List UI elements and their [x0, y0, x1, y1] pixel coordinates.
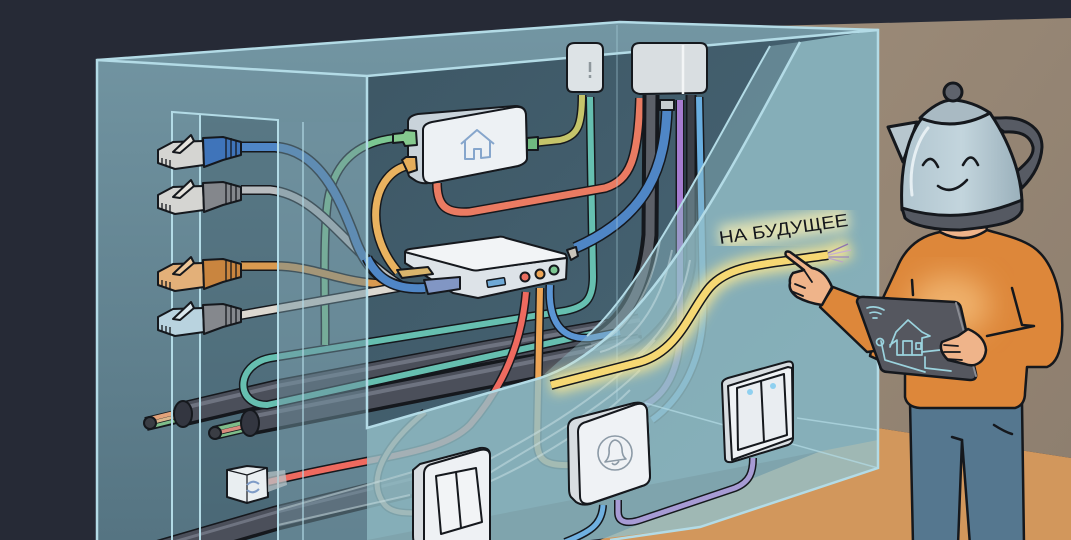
- switch: doorbell: [568, 403, 650, 505]
- glass reflection: light lower right pane: [367, 30, 878, 540]
- kettle spout: [888, 122, 917, 162]
- cable: blue from connector 1: [241, 147, 425, 288]
- sweater body and arm: [870, 230, 1062, 408]
- cable: salmon hub to box: [437, 98, 640, 212]
- cable: doorbell purple to right switch: [618, 458, 753, 522]
- cable bundle: black conduit from junction box: [590, 95, 691, 360]
- sweater sleeve left: [820, 287, 882, 352]
- sleeve folds: [912, 280, 1034, 440]
- cable: teal loop: [243, 97, 600, 405]
- connector: blue RJ45: [158, 135, 241, 169]
- device: junction box: [632, 43, 707, 110]
- cable: white from connector 4: [241, 287, 400, 315]
- cable: green: [325, 138, 395, 345]
- holding hand: [941, 329, 986, 365]
- cable: black 1: [183, 320, 640, 414]
- cable: purple from junction box: [645, 100, 680, 405]
- device: white plug adapter: [227, 466, 287, 503]
- cable: light blue from junction box: [652, 97, 703, 420]
- trousers: [910, 402, 1024, 540]
- sweater highlight: [910, 275, 990, 335]
- finger lines: [791, 270, 962, 360]
- cable: blue near router: [367, 258, 425, 288]
- kettle highlight: [911, 128, 928, 195]
- switch: double rocker right: [722, 362, 793, 462]
- cable ends with coloured wires: [144, 401, 259, 439]
- connector: grey RJ45: [158, 180, 241, 214]
- glass pane wash over cables right of the inner pane: [278, 122, 367, 540]
- wall: concrete: [770, 18, 1071, 458]
- glass reflection band between the diagonals: [540, 42, 800, 378]
- kettle lid: [920, 100, 990, 124]
- cable: orange hub to router: [376, 165, 410, 272]
- cable: black 3 lower: [160, 472, 440, 540]
- label: future: НА БУДУЩЕЕ: [718, 210, 849, 248]
- cable: black 2: [250, 340, 640, 423]
- kettle handle: [985, 118, 1042, 188]
- cable: tan loop to left switch: [377, 412, 425, 513]
- glass box: back left area: [97, 22, 878, 540]
- connector: orange RJ45: [158, 257, 241, 291]
- faded strands in the glass: [278, 240, 690, 525]
- kettle base ring: [902, 200, 1022, 230]
- tablet: [857, 297, 976, 380]
- device: home hub: [393, 106, 538, 183]
- neck: [940, 222, 987, 238]
- cable: tan from connector 3: [241, 266, 385, 284]
- frayed wire ends: [828, 244, 851, 262]
- cable: glowing yellow future cable: [551, 255, 828, 385]
- glass edges: [97, 22, 878, 540]
- kettle body: [902, 113, 1022, 222]
- cable: doorbell blue down: [565, 505, 603, 540]
- cable: thick blue router to box: [575, 108, 667, 248]
- kettle face: [923, 158, 978, 190]
- cable: router red down to plug: [268, 292, 526, 482]
- cable: grey from connector 2: [241, 190, 400, 285]
- pointing hand: [786, 252, 832, 305]
- glass panel: inner left strip: [200, 115, 278, 540]
- person: [786, 222, 1062, 540]
- cable: router orange down: [537, 288, 570, 465]
- glass box: central dark panel: [367, 30, 878, 540]
- cable: olive hub to sensor: [532, 95, 582, 143]
- floor: wood: [600, 428, 1071, 540]
- cable: router blue down: [550, 285, 620, 338]
- device: router: [397, 237, 578, 298]
- device: small sensor box: [567, 43, 603, 92]
- connector: white-grey RJ45: [158, 302, 241, 336]
- glow: label halo: [720, 218, 848, 238]
- glow: future cable halo: [551, 248, 850, 385]
- kettle head: [888, 83, 1042, 230]
- switch: double rocker left: [413, 448, 490, 540]
- kettle knob: [944, 83, 962, 101]
